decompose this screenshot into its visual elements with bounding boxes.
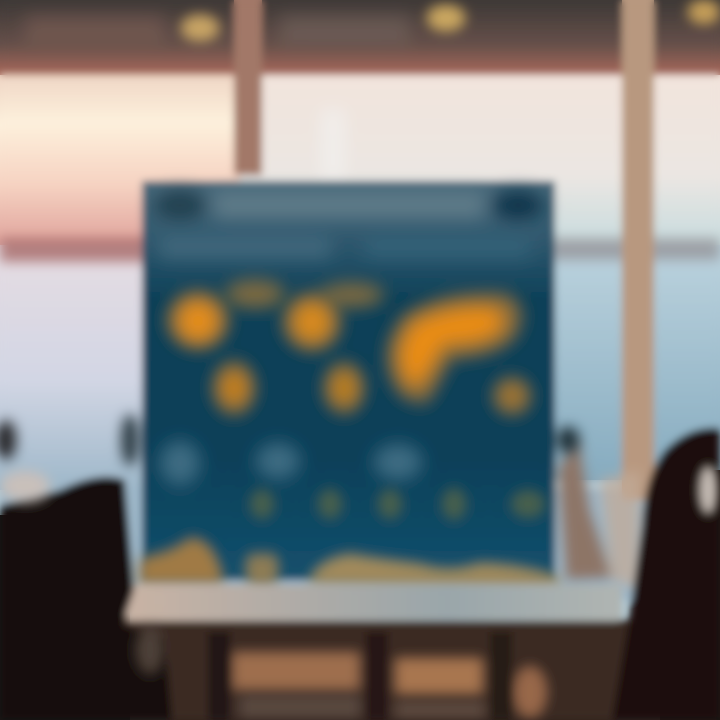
right easel post [558, 436, 640, 590]
table top [126, 585, 622, 621]
window horizontal rail [0, 238, 720, 262]
lower row of small olive icons [250, 488, 545, 520]
orange chart shapes at board base [138, 538, 560, 586]
lower dark table base [118, 620, 648, 720]
board header text bars [154, 190, 544, 258]
background: window sky and haze [0, 70, 720, 600]
distant white tower above board [322, 110, 344, 182]
silhouette: left person [0, 414, 172, 720]
window pillars [234, 0, 654, 500]
ceiling band with warm lights [0, 0, 720, 75]
silhouette: right person [556, 426, 720, 720]
panel: map board [138, 181, 560, 586]
lower row of pale circles [160, 441, 422, 485]
world map [168, 280, 530, 414]
